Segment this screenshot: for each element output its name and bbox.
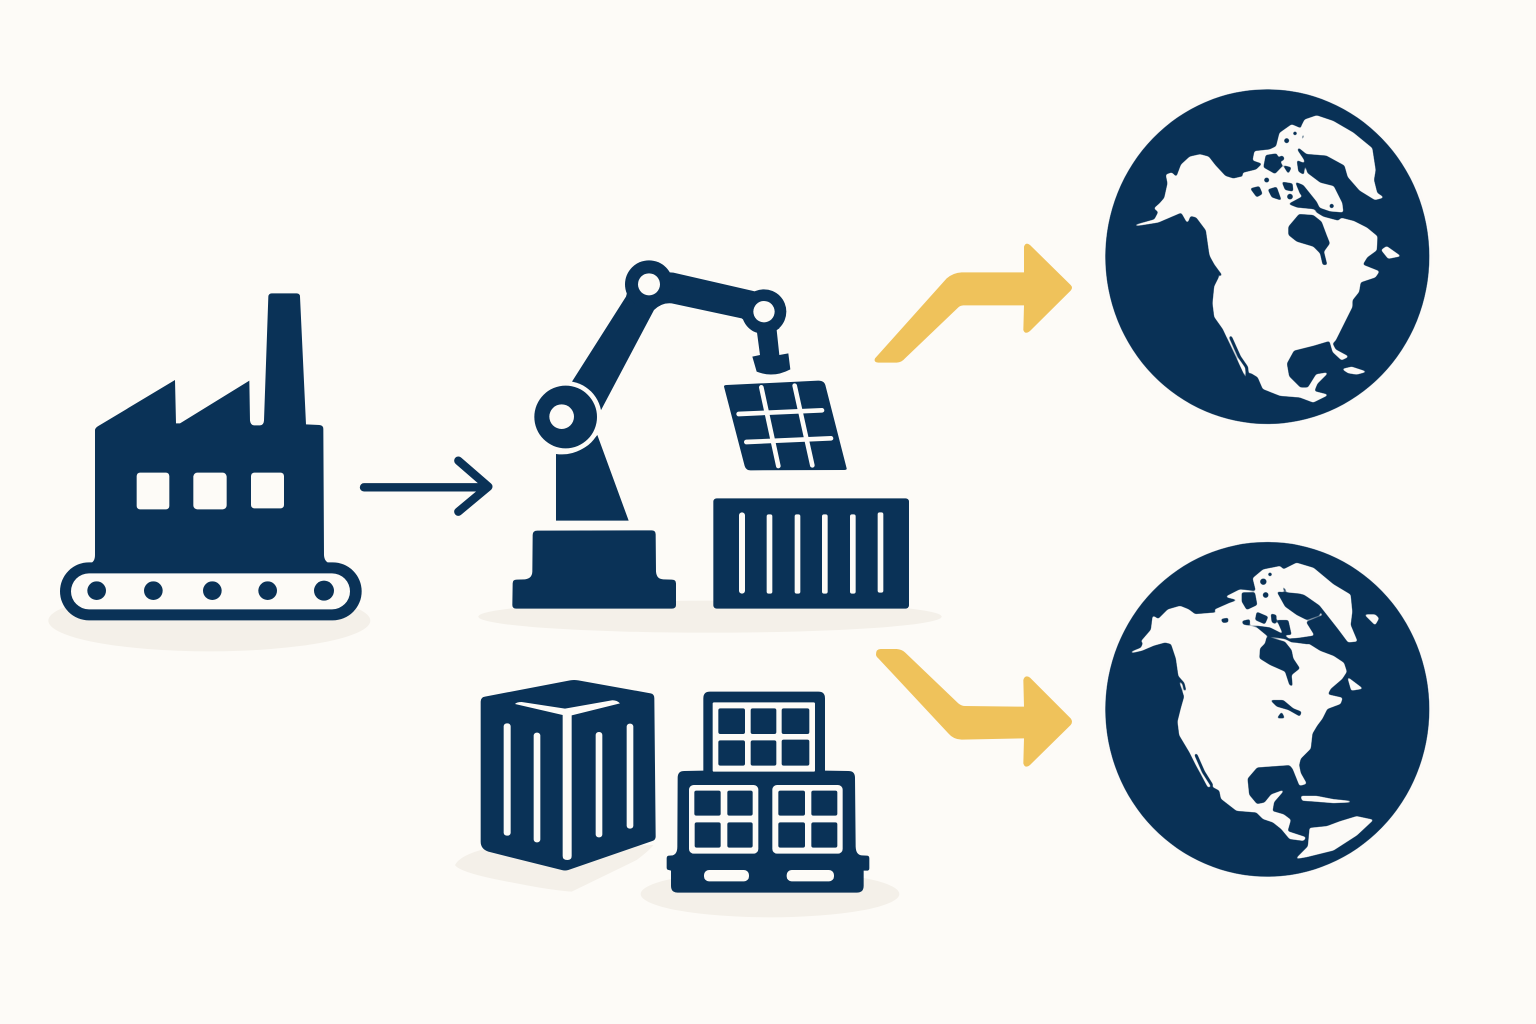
icon: factory on conveyor belt <box>48 293 488 651</box>
pallet slots <box>704 870 834 881</box>
Hudson Bay <box>1259 637 1300 687</box>
coastal inlets <box>1177 677 1212 785</box>
arrow: robot to lower globe <box>876 649 1072 767</box>
arrow: factory to robot <box>364 461 488 512</box>
Cuba <box>1302 797 1351 802</box>
icon: packed container and pallet of panels <box>455 680 899 917</box>
Greenland <box>1280 563 1357 642</box>
conveyor belt <box>60 562 362 620</box>
Hudson Bay <box>1288 214 1330 265</box>
icon: robot arm, solar panel and container <box>478 260 942 633</box>
robot arm <box>567 260 790 418</box>
lower globe ocean <box>1105 542 1429 877</box>
standing container <box>481 680 656 870</box>
factory windows <box>137 473 284 509</box>
icon: lower globe <box>1105 542 1430 877</box>
Arctic islands <box>1243 125 1344 221</box>
Great Lakes <box>1270 700 1302 718</box>
South America <box>1297 817 1373 858</box>
icon: upper globe <box>1105 89 1430 424</box>
Newfoundland <box>1382 247 1400 258</box>
container ground shadow <box>455 845 653 892</box>
pallet with stacked solar panels <box>667 692 869 893</box>
Iceland <box>1366 615 1378 624</box>
work area ground shadow <box>478 601 942 633</box>
infographic canvas <box>48 89 1430 918</box>
pallet ground shadow <box>641 871 899 917</box>
Caribbean island <box>1343 367 1365 374</box>
robot pedestal <box>556 435 629 521</box>
upper globe ocean <box>1105 89 1429 424</box>
solar panel held by robot <box>724 381 847 470</box>
factory ground shadow <box>48 590 370 651</box>
factory building silhouette <box>90 293 330 580</box>
North America landmass <box>1132 607 1346 840</box>
robot joint holes <box>638 273 775 322</box>
left panel <box>689 785 758 854</box>
arrow: robot to upper globe <box>875 244 1072 363</box>
Greenland <box>1298 116 1383 199</box>
Newfoundland <box>1348 678 1362 690</box>
shipping container <box>713 498 909 609</box>
right panel <box>772 785 843 854</box>
Arctic islands <box>1215 567 1322 644</box>
robot shoulder joint <box>530 381 602 453</box>
coastal inlets <box>1206 252 1247 375</box>
top panel <box>713 702 815 772</box>
North America landmass <box>1136 155 1378 402</box>
robot base <box>512 530 676 609</box>
